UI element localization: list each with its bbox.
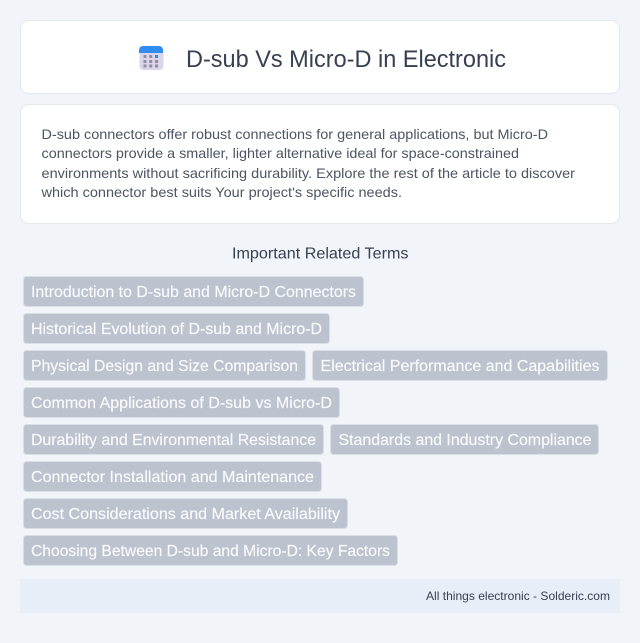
tag: durability [24, 424, 324, 454]
panel: intro text card [20, 104, 620, 224]
tag: durability: Durability and Environmental Resistance [31, 432, 316, 449]
text block: intro paragraph: environments without sacrificing durability. Explore the rest of the article to discover [42, 165, 575, 181]
tag: installation [24, 462, 322, 492]
text block: intro paragraph: which connector best suits Your project's specific needs. [40, 184, 402, 200]
tag: electrical performance [312, 350, 608, 380]
tag: historical evolution: Historical Evolution of D-sub and Micro-D [31, 321, 322, 338]
tag: electrical performance: Electrical Performance and Capabilities [320, 358, 600, 375]
tag: choosing [24, 536, 398, 566]
text block: intro paragraph [40, 126, 575, 200]
tag: physical design: Physical Design and Size Comparison [31, 358, 298, 375]
tag: introduction: Introduction to D-sub and Micro-D Connectors [31, 284, 356, 301]
tag: physical design [24, 350, 306, 380]
text block: intro paragraph: connectors provide a smaller, lighter alternative ideal for space-constrained [42, 145, 519, 161]
heading: related terms: Important Related Terms [232, 246, 408, 262]
footer text: All things electronic - Solderic.com [426, 589, 610, 603]
tag: choosing: Choosing Between D-sub and Micro-D: Key Factors [31, 543, 390, 560]
tag: historical evolution [24, 314, 330, 344]
tag: common applications: Common Applications of D-sub vs Micro-D [31, 395, 332, 412]
panel: header card [20, 20, 620, 94]
footer band [20, 579, 620, 613]
tag: installation: Connector Installation and Maintenance [31, 469, 314, 486]
tag: common applications [24, 388, 340, 418]
text block: intro paragraph: D-sub connectors offer robust connections for general applications, but Micro-D [42, 126, 548, 142]
tag: standards [330, 424, 598, 454]
tag: standards: Standards and Industry Compliance [338, 432, 592, 449]
tag: introduction [24, 276, 364, 306]
tag list [24, 276, 608, 566]
title: D-sub Vs Micro-D in Electronic [186, 46, 506, 73]
tag: cost [24, 498, 348, 528]
tag: cost: Cost Considerations and Market Availability [31, 506, 340, 523]
icon: calendar [139, 46, 164, 70]
